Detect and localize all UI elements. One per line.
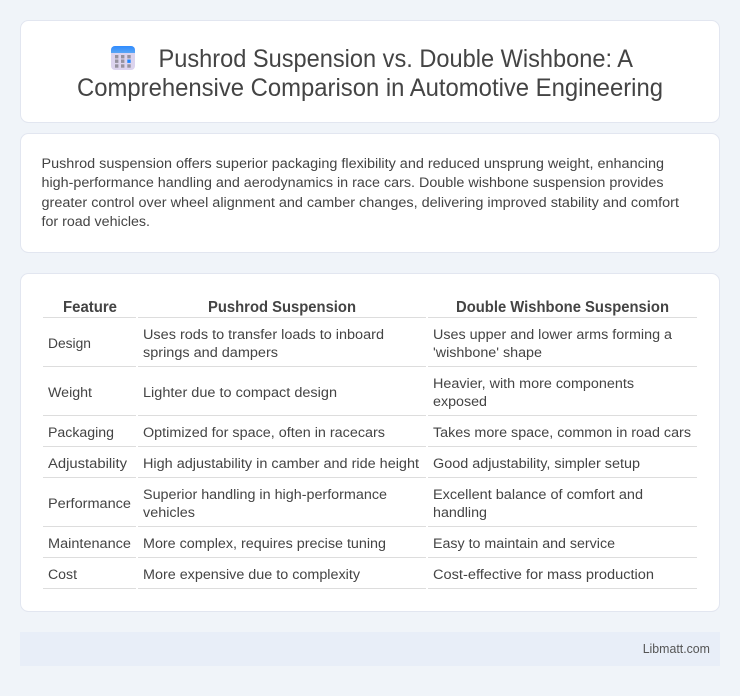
row: Design: 'wishbone' shape	[433, 345, 542, 361]
footer bar	[20, 632, 720, 666]
row: Performance: Performance	[48, 496, 131, 512]
row: Cost: Cost-effective for mass production	[433, 567, 654, 583]
row: Performance: Superior handling in high-performance	[143, 487, 387, 503]
row: Cost: More expensive due to complexity	[143, 567, 361, 583]
row: Weight: Weight	[48, 385, 92, 401]
row: Weight: exposed	[433, 394, 487, 410]
title: Comprehensive Comparison in Automotive Engineering	[77, 74, 663, 102]
row: Design: Uses upper and lower arms forming a	[433, 327, 672, 343]
text block: summary paragraph: Pushrod suspension offers superior packaging flexibility and reduced unsprung weight, enhancing	[42, 156, 664, 172]
row: Packaging: Packaging	[48, 425, 114, 441]
row: Cost	[48, 567, 654, 583]
row: Design: Uses rods to transfer loads to inboard	[143, 327, 384, 343]
text block: summary paragraph: for road vehicles.	[42, 214, 150, 230]
text block: summary paragraph: high-performance handling and aerodynamics in race cars. Double wishbone suspension provides	[42, 175, 664, 191]
row: Maintenance: More complex, requires precise tuning	[143, 536, 386, 552]
panel: comparison table	[20, 274, 720, 612]
footer credit: Libmatt.com	[643, 642, 710, 656]
icon: calendar grid	[111, 46, 135, 70]
row: Adjustability: Adjustability	[48, 456, 128, 472]
row: Weight: Heavier, with more components	[433, 376, 634, 392]
row: Performance: handling	[433, 505, 487, 521]
row: Performance	[48, 487, 643, 521]
title	[77, 45, 663, 102]
row: Weight: Lighter due to compact design	[143, 385, 337, 401]
table header row: Pushrod Suspension	[208, 299, 356, 316]
title: Pushrod Suspension vs. Double Wishbone: A	[158, 45, 633, 73]
panel: title header	[20, 20, 720, 122]
row: Packaging	[48, 425, 691, 441]
row: Maintenance: Maintenance	[48, 536, 131, 552]
row: Adjustability: Good adjustability, simpler setup	[433, 456, 640, 472]
row: Maintenance: Easy to maintain and service	[433, 536, 615, 552]
panel: introduction	[20, 134, 720, 252]
text block: summary paragraph	[42, 156, 679, 230]
row: Weight	[48, 376, 634, 410]
row: Adjustability: High adjustability in camber and ride height	[143, 456, 419, 472]
table header row: Feature	[63, 299, 117, 316]
row: Performance: Excellent balance of comfort and	[433, 487, 643, 503]
row: Packaging: Takes more space, common in road cars	[433, 425, 691, 441]
row: Design: springs and dampers	[143, 345, 278, 361]
row: Design	[48, 327, 672, 361]
table header row	[63, 299, 669, 316]
row: Design: Design	[48, 336, 91, 352]
row: Performance: vehicles	[143, 505, 195, 521]
table header row: Double Wishbone Suspension	[456, 299, 669, 316]
text block: summary paragraph: greater control over wheel alignment and camber changes, delivering improved stability and comfort	[42, 195, 679, 211]
row: Adjustability	[48, 456, 640, 472]
row: Cost: Cost	[48, 567, 77, 583]
row: Maintenance	[48, 536, 615, 552]
row: Packaging: Optimized for space, often in racecars	[143, 425, 385, 441]
table grid lines	[43, 318, 697, 588]
